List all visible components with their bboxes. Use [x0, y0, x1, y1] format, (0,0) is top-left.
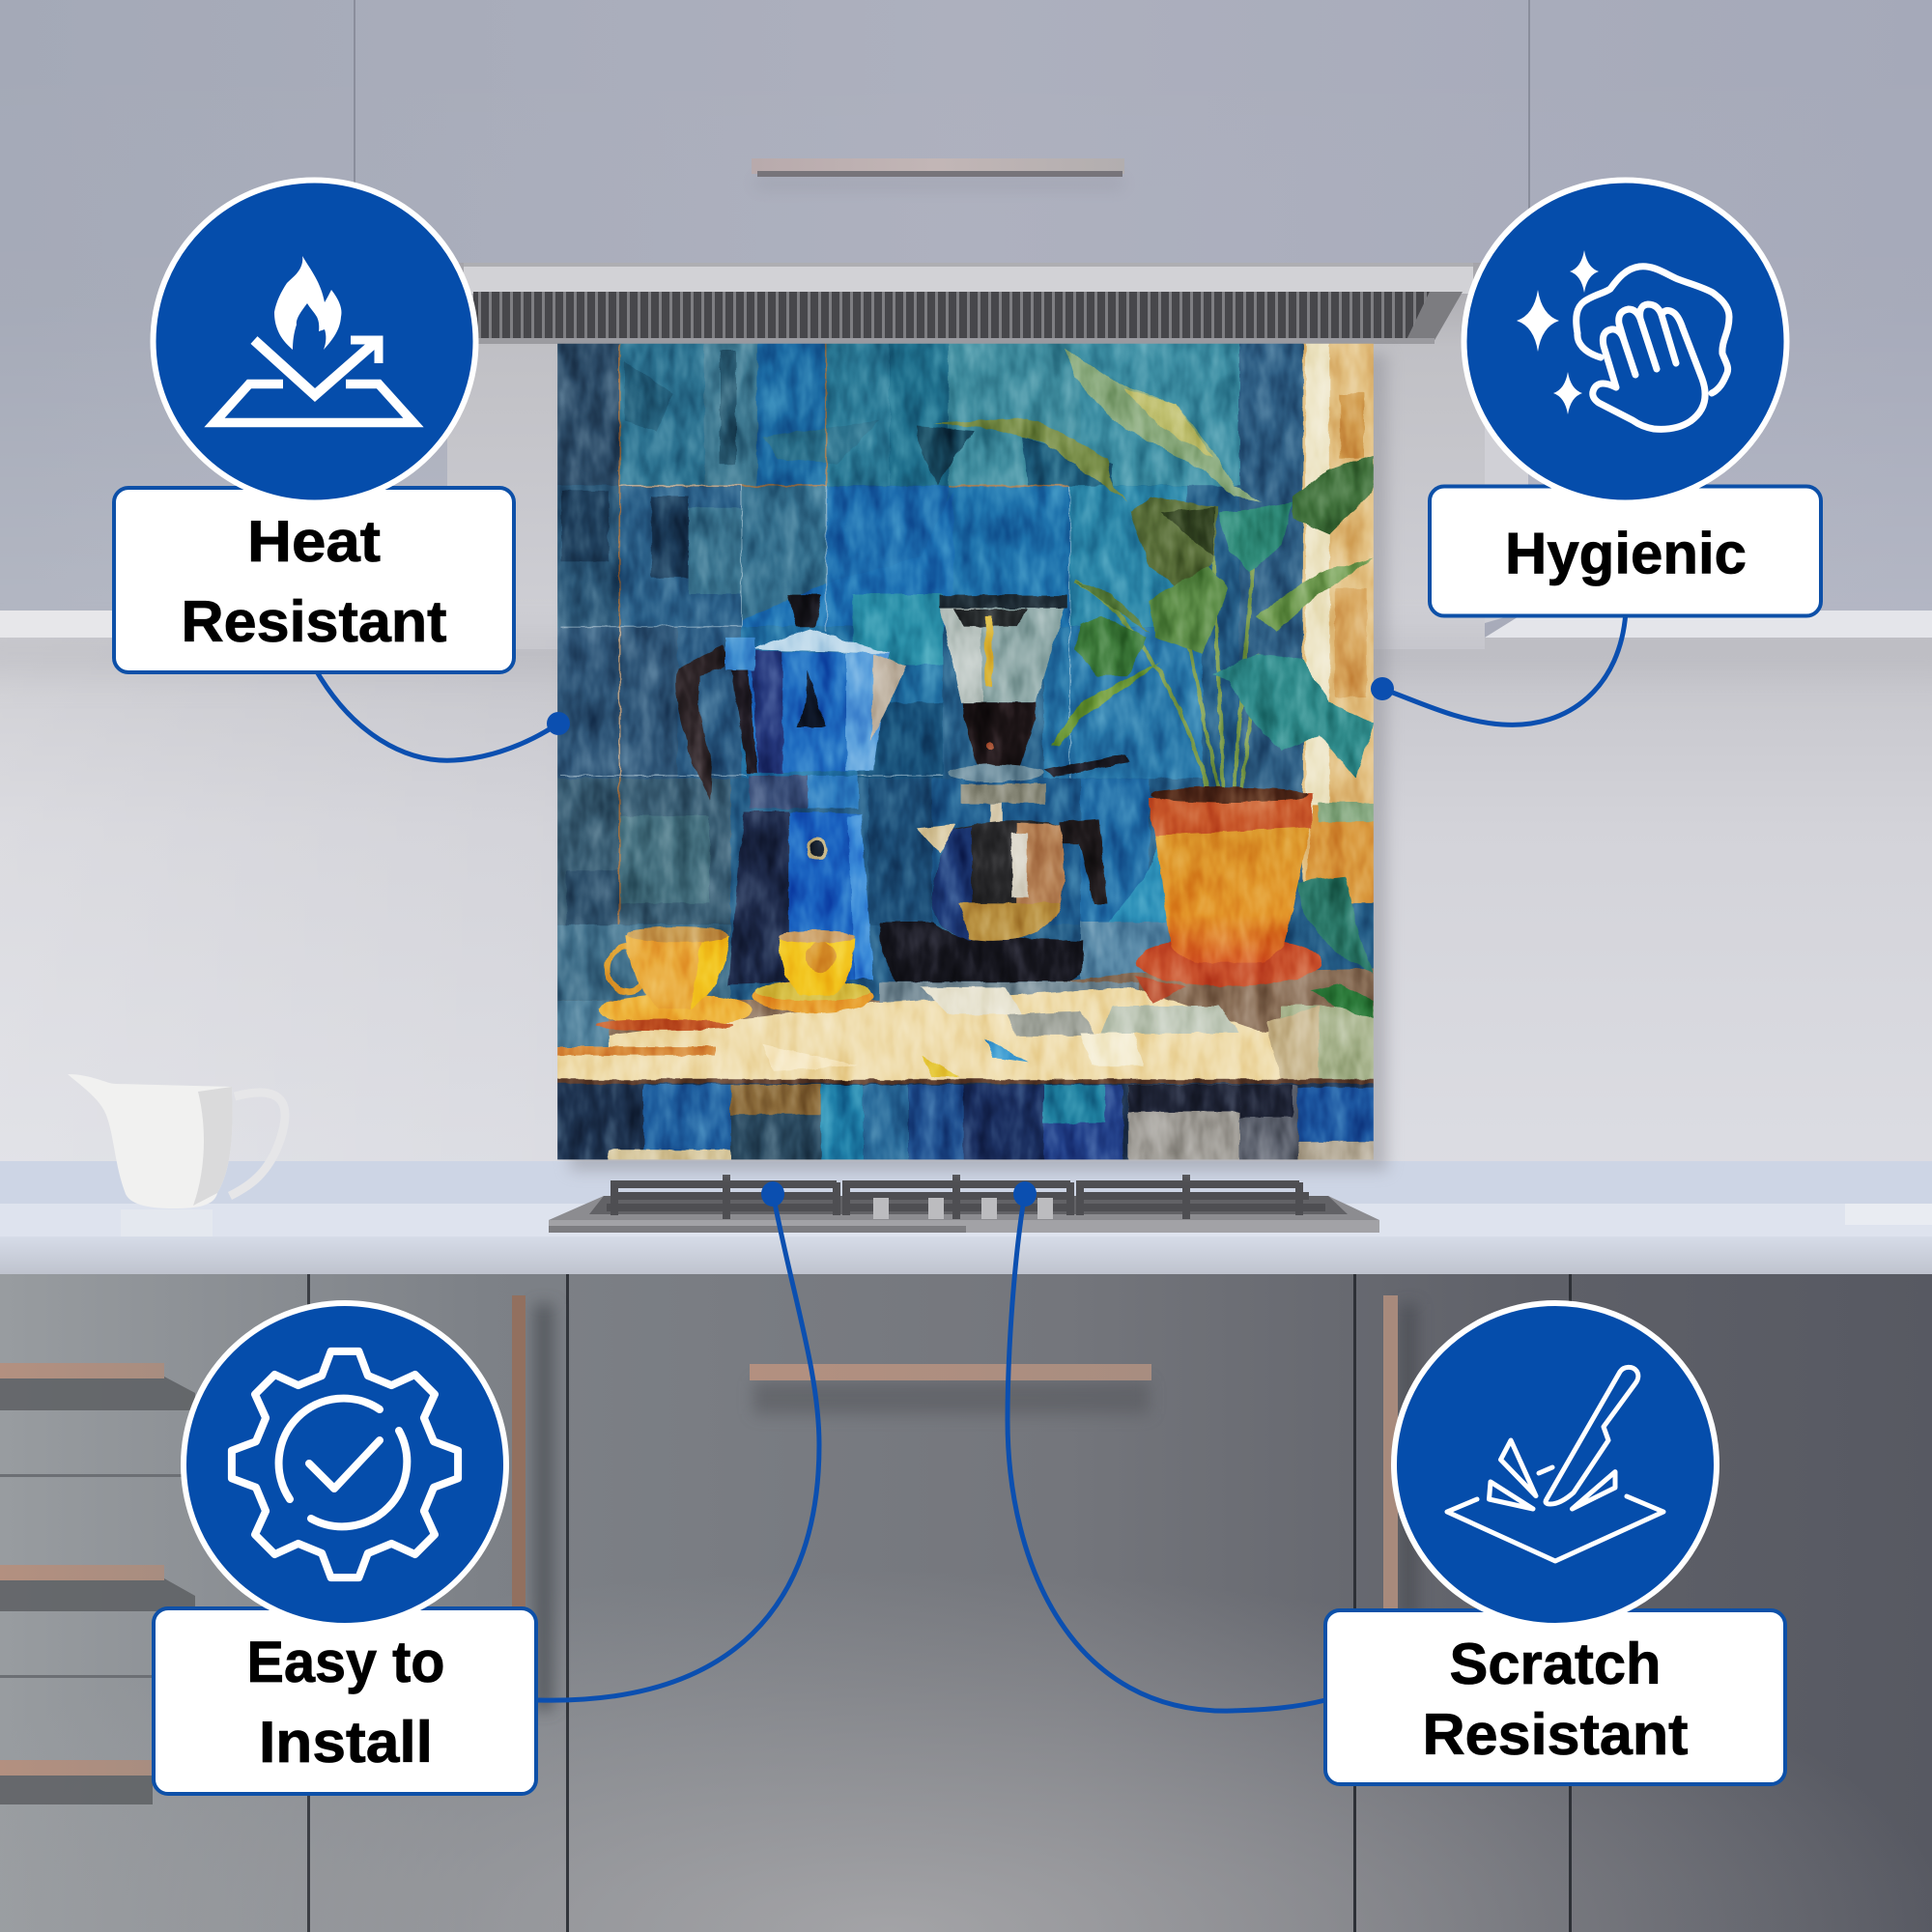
- badge circle: [153, 180, 475, 502]
- connector: easy to install: [538, 1181, 819, 1700]
- label text: heat resistant: Resistant: [182, 589, 447, 654]
- dot: heat resistant: [547, 712, 570, 735]
- label text: heat resistant: [182, 509, 447, 654]
- badge circle: [184, 1303, 506, 1626]
- painting: coffee grinder and kettle: [879, 595, 1129, 981]
- icon: knife scratching a surface: [1447, 1367, 1663, 1561]
- label text: scratch resistant: Resistant: [1422, 1702, 1689, 1767]
- label text: heat resistant: Heat: [247, 509, 381, 574]
- kitchen background: [0, 0, 1932, 1179]
- painting: yellow coffee cups: [596, 927, 874, 1031]
- upper cabinet handle: [752, 158, 1124, 187]
- label text: hygienic: Hygienic: [1505, 522, 1747, 585]
- extractor hood: [464, 263, 1473, 344]
- white jug: [68, 1074, 285, 1208]
- label text: scratch resistant: Scratch: [1449, 1632, 1662, 1696]
- badge circle: [1394, 1303, 1717, 1626]
- label text: easy to install: Easy to: [247, 1630, 444, 1694]
- connector: scratch resistant: [1008, 1181, 1325, 1711]
- label box: [114, 488, 514, 672]
- label box: [154, 1608, 536, 1794]
- icon: gear with check mark: [232, 1351, 458, 1577]
- label text: easy to install: Install: [259, 1710, 433, 1775]
- splashback painting: coffee still life: [557, 344, 1374, 1159]
- callout: easy to install: [154, 1303, 536, 1794]
- countertop: [0, 1161, 1932, 1274]
- callout: scratch resistant: [1325, 1303, 1785, 1784]
- callout: hygienic: [1430, 180, 1821, 616]
- dot: scratch resistant: [1013, 1181, 1037, 1207]
- painting drop shadow: [570, 354, 1387, 1171]
- painting: table: [557, 968, 1374, 1082]
- icon: hand wiping with sparkles: [1517, 250, 1729, 429]
- label text: scratch resistant: [1422, 1632, 1689, 1767]
- gas hob: [549, 1175, 1379, 1233]
- label text: easy to install: [247, 1630, 444, 1775]
- connector: heat resistant: [315, 668, 570, 760]
- dot: easy to install: [761, 1181, 784, 1207]
- dot: hygienic: [1371, 677, 1394, 700]
- lower cabinets: [0, 1274, 1932, 1932]
- label box: [1430, 487, 1821, 616]
- connector: hygienic: [1371, 611, 1626, 724]
- icon: flame on surface with arrow: [214, 256, 413, 423]
- badge circle: [1464, 180, 1787, 502]
- painting: dripping bottom band: [557, 1078, 1374, 1159]
- callout: heat resistant: [114, 180, 514, 672]
- painting: potted plant: [932, 348, 1409, 1020]
- label box: [1325, 1610, 1785, 1784]
- painting: blue tile background: [557, 344, 1374, 1001]
- drawer and door handles: [0, 1295, 1417, 1804]
- painting: blue moka pot: [675, 595, 907, 984]
